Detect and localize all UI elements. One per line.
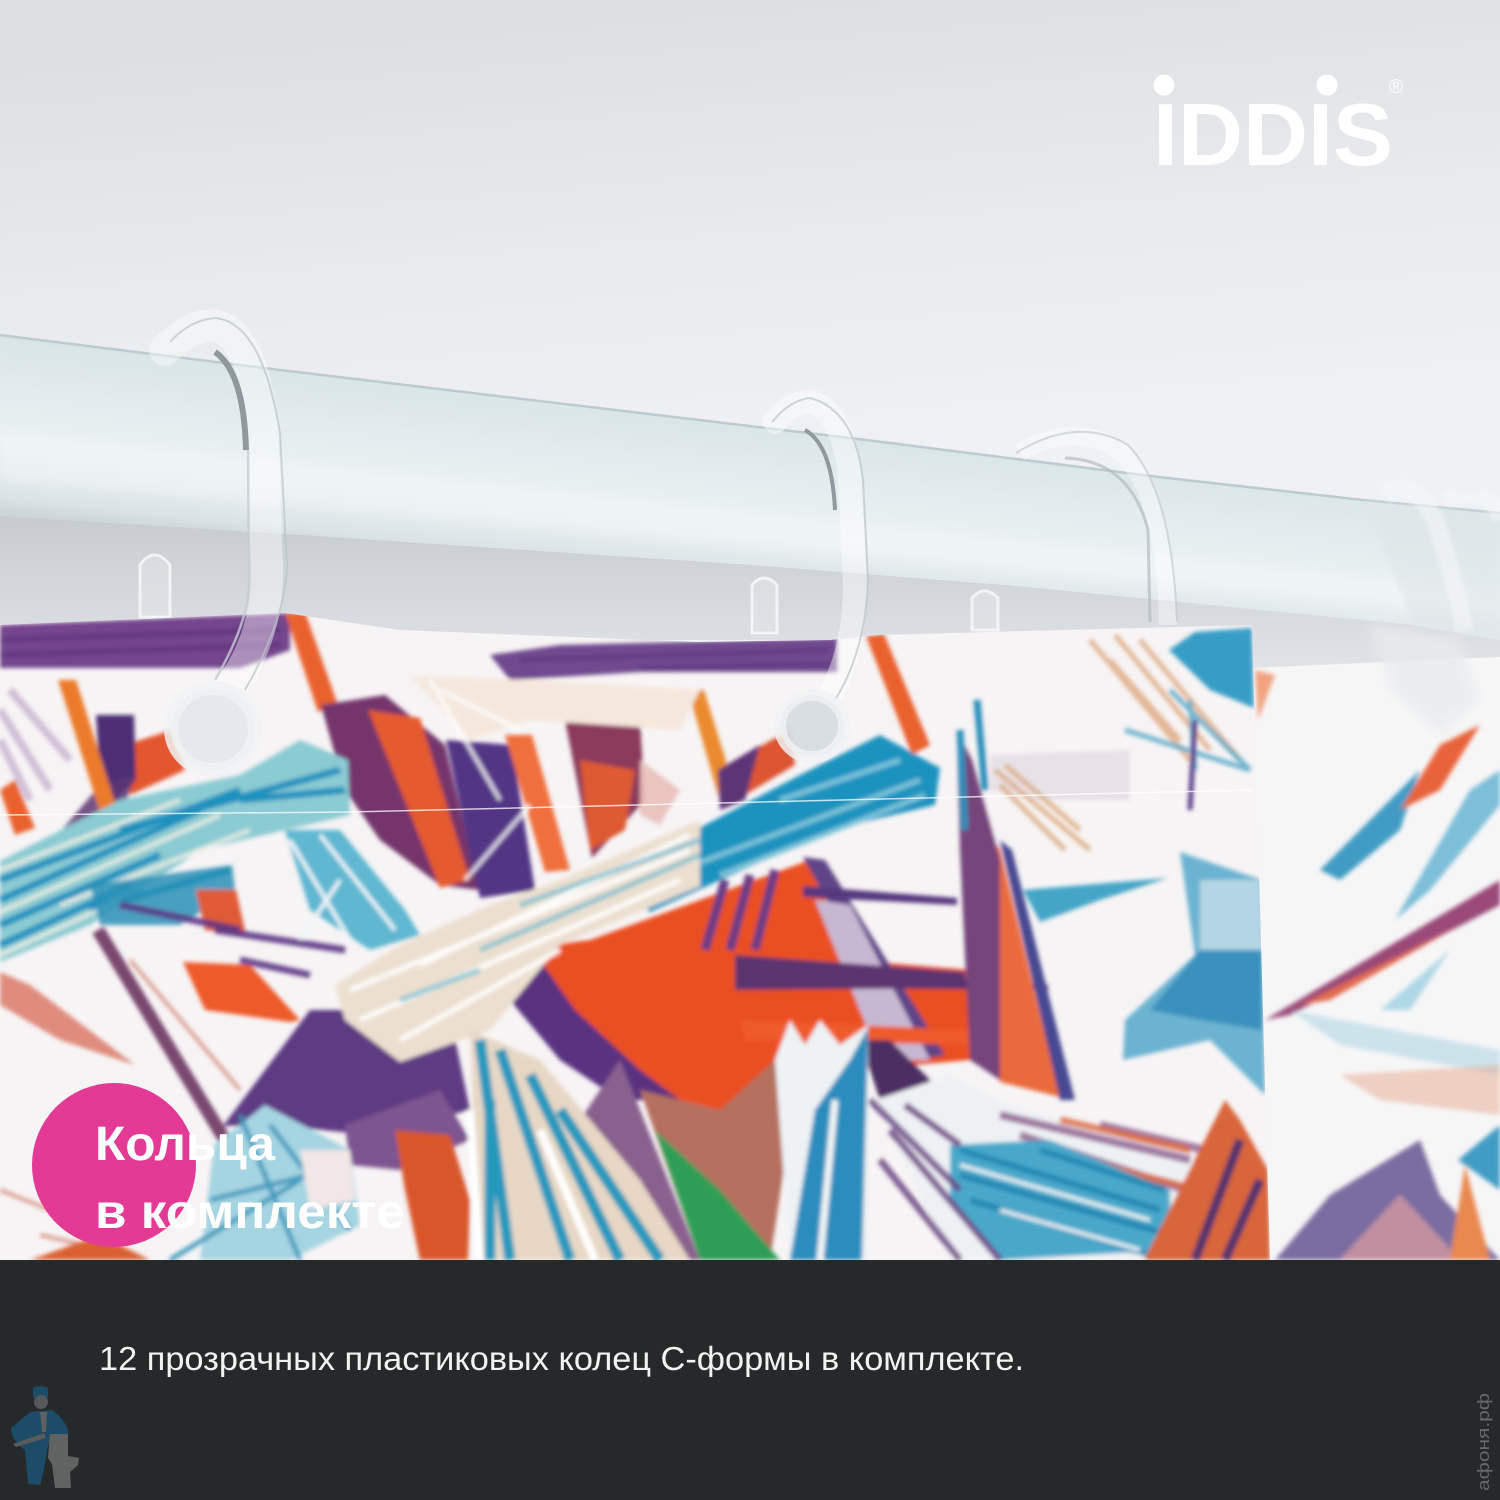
centre bottom orange burst	[505, 860, 970, 1110]
purple top hem centre	[490, 638, 837, 680]
centre hem streaks	[520, 650, 830, 668]
purple spikes edge	[510, 964, 680, 1104]
dark footer band	[0, 1260, 1500, 1500]
bottom fan, centre	[470, 1030, 690, 1260]
purple clump by eyelet	[96, 715, 136, 800]
red patch by second eyelet	[744, 732, 798, 796]
eyelet 2	[780, 695, 844, 757]
right blue shard	[1123, 852, 1265, 1095]
blue streak block	[950, 1140, 1170, 1260]
purple mid strokes	[120, 905, 345, 975]
blue horizontal taper	[1023, 878, 1168, 922]
thin lines left	[0, 960, 240, 1255]
purple diagonal band	[803, 857, 945, 1060]
curtain ring 5, out of focus	[1445, 494, 1500, 520]
badge title line 2: в комплекте	[95, 1186, 405, 1239]
feature badge	[32, 1083, 405, 1247]
blue main feather	[610, 735, 940, 912]
purple below clump	[62, 776, 133, 830]
purple lower cluster	[223, 1010, 470, 1135]
thin orange shards upper	[58, 680, 118, 812]
cream burst above mass	[410, 676, 700, 740]
orange horizontals	[741, 1020, 970, 1045]
diagonal brown line	[98, 930, 225, 1140]
eyelet 1	[171, 688, 255, 770]
purple top hem left	[0, 613, 290, 668]
icon: plumber with toilet watermark	[11, 1386, 79, 1488]
lower left orange	[395, 1130, 470, 1260]
registered mark: ®	[1389, 77, 1403, 98]
green shard	[655, 1130, 780, 1260]
panel: rear curtain on the right	[1250, 655, 1500, 1260]
top right feathers	[1090, 635, 1240, 760]
curtain ring 3	[1016, 432, 1177, 625]
pale fan inside the badge area	[200, 1105, 360, 1260]
red patch by eyelet	[125, 730, 185, 795]
bottom right white block	[875, 1075, 1220, 1260]
curtain ring 2	[772, 398, 868, 757]
description text: 12 прозрачных пластиковых колец С-формы в комплекте.	[99, 1340, 1024, 1377]
cream band	[335, 820, 700, 1062]
orange-purple filler right of fan	[640, 1060, 790, 1260]
curtain ring 1	[165, 318, 287, 770]
central red-purple mass	[321, 695, 480, 890]
logo: IDDIS: IDDIS	[1153, 85, 1393, 184]
hem streaks	[0, 630, 280, 655]
purple horizontals	[914, 977, 1051, 992]
curtain rod	[0, 335, 1500, 640]
back ring stubs behind the rod	[140, 555, 998, 633]
dark wedge under horizontals	[864, 1037, 932, 1100]
blue cloud by mass	[285, 830, 420, 950]
curtain ring 4, out of focus	[1385, 489, 1465, 630]
purple dashes left of block	[870, 1100, 1000, 1260]
blue centre spike	[775, 1020, 868, 1260]
purple-orange streaks	[1000, 1115, 1205, 1195]
orange left-mid patches	[196, 890, 246, 935]
bottom right orange	[1144, 1100, 1270, 1260]
blurred eyelet on rear curtain	[1370, 625, 1480, 735]
badge title line 1: Кольца	[95, 1118, 275, 1171]
pale grey feather right of tower	[990, 750, 1130, 800]
shadow zone under the rod	[0, 500, 1500, 680]
white scratches on mass	[430, 680, 530, 880]
left band streaks	[0, 770, 345, 945]
top right dome	[1169, 628, 1254, 708]
panel: front shower curtain with abstract print	[0, 610, 1280, 1260]
left teal band base	[0, 740, 350, 962]
watermark: vertical site name: афоня.рф	[1474, 1393, 1493, 1491]
tower shard	[994, 843, 1062, 1100]
blue fork	[90, 865, 235, 925]
tan feather	[995, 765, 1090, 850]
left pale streaks	[0, 690, 70, 800]
orange-purple stripes above the burst	[705, 870, 775, 950]
seam line	[0, 790, 1252, 815]
